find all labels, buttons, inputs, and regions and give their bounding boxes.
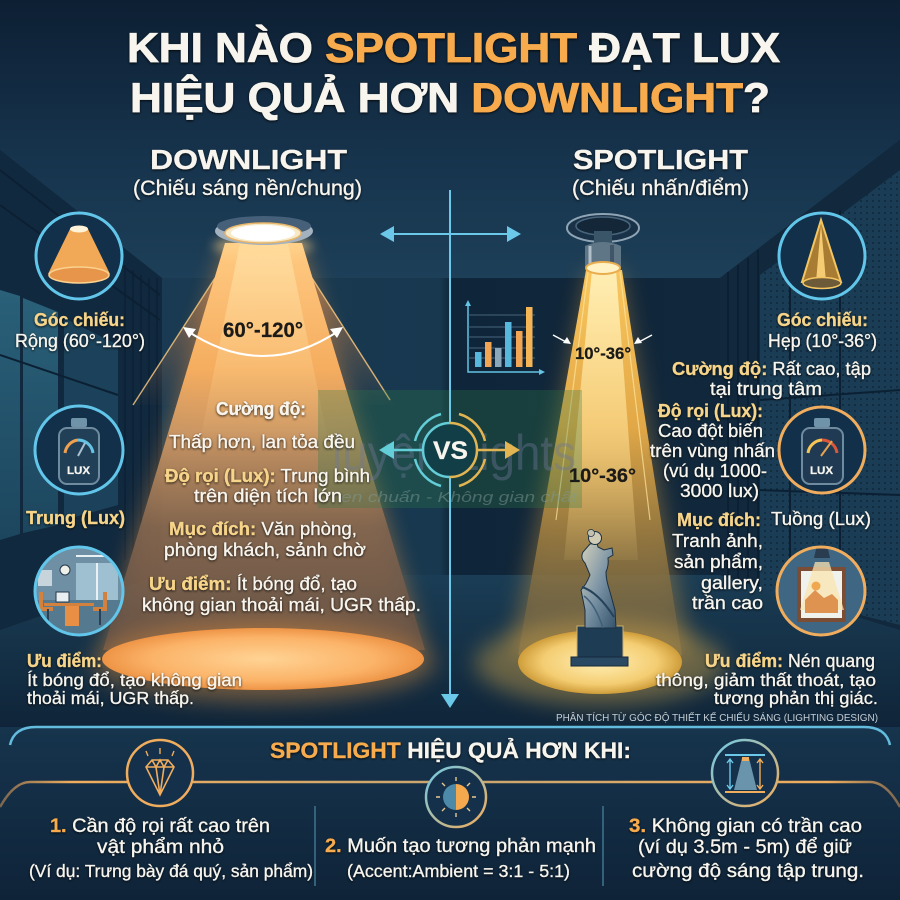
condition 3 <box>629 816 864 882</box>
spotlight description text: trần cao <box>692 593 763 613</box>
left text: advantages: Ưu điểm: <box>27 651 102 671</box>
icon: diamond <box>127 740 193 806</box>
downlight description text: không gian thoải mái, UGR thấp. <box>142 595 421 615</box>
left text: advantages: thoải mái, UGR thấp. <box>27 688 194 708</box>
double arrow top <box>380 226 521 242</box>
spotlight description text: Cao đột biến <box>658 421 763 441</box>
bottom panel <box>0 727 900 900</box>
angle label and arrows 10-36 <box>553 335 652 363</box>
left labels: beam angle: Rộng (60°-120°) <box>15 331 145 351</box>
spotlight description text <box>650 359 871 613</box>
spotlight description text: Tranh ảnh, <box>672 531 763 551</box>
angle label and arrows 10-36: 10°-36° <box>575 345 631 363</box>
VS badge with arrows: VS <box>433 437 468 465</box>
bar chart icon <box>465 300 545 375</box>
icon: contrast <box>426 767 486 827</box>
right label: beam angle: Hẹp (10°-36°) <box>768 331 877 351</box>
right text: advantages <box>656 651 878 708</box>
icon: narrow beam <box>779 213 865 299</box>
beam angle arc 60-120: 60°-120° <box>223 319 303 342</box>
VS badge with arrows <box>379 414 520 486</box>
main title: KHI NÀO SPOTLIGHT ĐẠT LUX <box>127 24 780 71</box>
downlight description text: Thấp hơn, lan tỏa đều <box>169 432 355 452</box>
central divider axis <box>441 190 459 708</box>
downlight beam <box>103 243 425 650</box>
heading: spotlight: (Chiếu nhấn/điểm) <box>572 177 749 200</box>
spotlight description text: trên vùng nhấn <box>650 441 775 461</box>
downlight fixture <box>213 216 313 256</box>
source note: PHÂN TÍCH TỪ GÓC ĐỘ THIẾT KẾ CHIẾU SÁNG (LIGHTING DESIGN) <box>556 711 878 724</box>
watermark band: en chuẩn - Không gian chất <box>341 489 578 506</box>
condition 3: (ví dụ 3.5m - 5m) để giữ <box>638 837 852 858</box>
spotlight description text: Độ rọi (Lux): <box>658 401 763 421</box>
left text: advantages <box>27 651 242 708</box>
downlight description text: trên diện tích lớn <box>194 486 342 506</box>
downlight description text: Ưu điểm: Ít bóng đổ, tạo <box>149 574 357 594</box>
watermark band <box>318 390 582 508</box>
condition 3: 3. Không gian có trần cao <box>629 816 862 837</box>
condition 1: 1. Cần độ rọi rất cao trên <box>50 816 270 837</box>
condition 2: (Accent:Ambient = 3:1 - 5:1) <box>347 861 570 881</box>
downlight description text: Độ rọi (Lux): Trung bình <box>165 466 370 486</box>
heading: downlight: DOWNLIGHT <box>150 144 347 175</box>
condition 1 <box>29 816 313 881</box>
downlight description text: Mục đích: Văn phòng, <box>169 519 357 539</box>
right text: advantages: tương phản thị giác. <box>714 688 878 708</box>
icon: office <box>34 546 124 640</box>
main title: HIỆU QUẢ HƠN DOWNLIGHT ? <box>130 73 770 121</box>
heading: spotlight <box>572 144 749 200</box>
spotlight description text: Mục đích: <box>677 510 761 530</box>
icon: lux meter right <box>779 407 865 493</box>
main title <box>127 24 780 121</box>
icon: wide beam <box>36 213 122 299</box>
bottom heading: SPOTLIGHT HIỆU QUẢ HƠN KHI: <box>270 738 631 763</box>
spotlight description text: Tuồng (Lux) <box>771 509 871 529</box>
spotlight description text: 3000 lux) <box>680 481 759 501</box>
icon: framed picture <box>777 545 865 635</box>
right text: advantages: thông, giảm thất thoát, tạo <box>656 670 876 690</box>
spotlight description text: gallery, <box>701 573 763 593</box>
watermark band: luyện Lights <box>332 425 576 481</box>
spotlight beam <box>510 270 690 655</box>
right label: beam angle <box>768 310 877 351</box>
condition 1: (Ví dụ: Trưng bày đá quý, sản phẩm) <box>29 861 313 881</box>
spotlight floor pool <box>475 621 725 705</box>
right label: beam angle: Góc chiếu: <box>777 310 868 330</box>
left labels: beam angle: Góc chiếu: <box>34 310 125 330</box>
statue on pedestal <box>571 530 628 666</box>
condition 2: 2. Muốn tạo tương phản mạnh <box>325 836 596 857</box>
icon: lux meter left: LUX <box>67 465 91 477</box>
downlight floor pool <box>91 622 435 702</box>
spotlight fixture <box>567 214 639 274</box>
downlight description text <box>142 399 421 615</box>
downlight description text: phòng khách, sảnh chờ <box>164 540 366 560</box>
left label: lux: Trung (Lux) <box>26 508 125 528</box>
heading: spotlight: SPOTLIGHT <box>573 144 748 175</box>
angle label lower: 10°-36° <box>569 466 636 487</box>
condition 2 <box>325 836 596 881</box>
heading: downlight: (Chiếu sáng nền/chung) <box>133 177 362 200</box>
downlight description text: Cường độ: <box>216 399 306 419</box>
condition 3: cường độ sáng tập trung. <box>632 861 864 882</box>
icon: lux meter left <box>35 406 123 494</box>
left text: advantages: Ít bóng đổ, tạo không gian <box>27 670 242 690</box>
spotlight description text: tại trung tâm <box>710 379 822 399</box>
icon: lux meter right: LUX <box>810 465 834 477</box>
condition 1: vật phẩm nhỏ <box>97 837 224 858</box>
spotlight description text: (vú dụ 1000- <box>663 461 767 481</box>
icon: ceiling height <box>712 740 778 806</box>
heading: downlight <box>133 144 362 200</box>
spotlight description text: Cường độ: Rất cao, tập <box>672 359 871 379</box>
beam angle arc 60-120 <box>183 319 343 356</box>
left labels: beam angle <box>15 310 145 351</box>
spotlight description text: sản phẩm, <box>674 552 763 572</box>
right text: advantages: Ưu điểm: Nén quang <box>705 651 875 671</box>
